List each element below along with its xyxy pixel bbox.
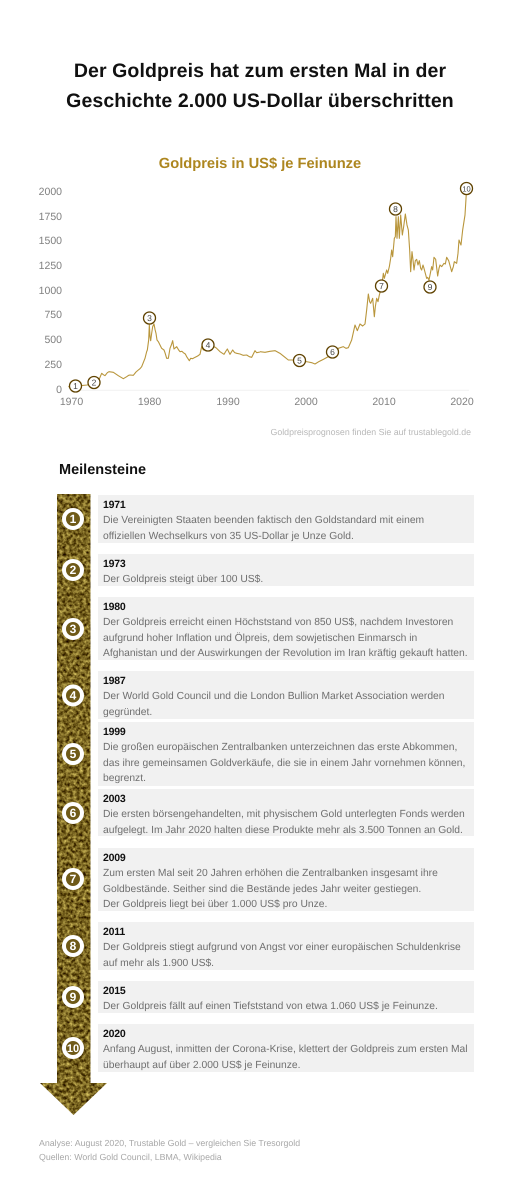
panel: 2011: 2011 <box>103 926 125 938</box>
panel: 1999 <box>98 722 474 786</box>
panel: 1971: 1971 <box>103 499 126 511</box>
footer: sources <box>39 1138 300 1162</box>
chart marker numbers: 7 <box>379 281 384 291</box>
panel: 2015: Der Goldpreis fällt auf einen Tiefststand von etwa 1.060 US$ je Feinunze. <box>103 1001 438 1012</box>
chart marker numbers: 3 <box>147 313 152 323</box>
panel: 2020 <box>98 1024 474 1072</box>
panel: 2003: aufgelegt. Im Jahr 2020 halten diese Produkte mehr als 3.500 Tonnen an Gold. <box>103 825 463 836</box>
chart marker numbers <box>73 184 471 391</box>
panel: 2003: 2003 <box>103 793 126 805</box>
panel: 2003: Die ersten börsengehandelten, mit physischem Gold unterlegten Fonds werden <box>103 809 465 820</box>
panel: 1971: offiziellen Wechselkurs von 35 US-Dollar je Unze Gold. <box>103 531 354 542</box>
panel: 2020: Anfang August, inmitten der Corona-Krise, klettert der Goldpreis zum ersten Mal <box>103 1044 468 1055</box>
chart marker numbers: 10 <box>462 184 471 194</box>
panel: 1973: 1973 <box>103 558 126 570</box>
panel: 2009: Zum ersten Mal seit 20 Jahren erhöhen die Zentralbanken insgesamt ihre <box>103 868 438 879</box>
x axis labels: 1980 <box>138 396 161 408</box>
panel: 2015: 2015 <box>103 985 126 997</box>
timeline badge numbers: 3 <box>70 622 77 636</box>
panel: 1980: 1980 <box>103 601 126 613</box>
panel: 1980: aufgrund hoher Inflation und Ölpreis, dem sowjetischen Einmarsch in <box>103 633 417 644</box>
panel: 2003 <box>98 789 474 836</box>
x axis labels: 2020 <box>450 396 474 408</box>
panel: 1980: Afghanistan und der Auswirkungen der Revolution im Iran kräftig gekauft hatten. <box>103 648 468 659</box>
footer: sources: Quellen: World Gold Council, LBMA, Wikipedia <box>39 1152 222 1162</box>
timeline badge numbers: 8 <box>70 939 77 953</box>
panel: 2009: Goldbestände. Seither sind die Bestände jedes Jahr weiter gestiegen. <box>103 884 421 895</box>
chart marker numbers: 9 <box>428 282 433 292</box>
timeline badge numbers: 7 <box>70 872 77 886</box>
y axis labels: 750 <box>44 309 62 321</box>
panel: 2015 <box>98 981 474 1013</box>
panel: 1987: Der World Gold Council und die London Bullion Market Association werden <box>103 691 445 702</box>
y axis labels: 1000 <box>39 285 62 297</box>
panel: 1999: das ihre gemeinsamen Goldverkäufe, die sie in einem Jahr vornehmen können, <box>103 758 465 769</box>
title: Geschichte 2.000 US-Dollar überschritten <box>66 90 454 112</box>
y axis labels: 1750 <box>39 211 62 223</box>
timeline badge numbers: 1 <box>70 512 77 526</box>
panel: 2011: auf mehr als 1.900 US$. <box>103 958 214 969</box>
panel: 1999: 1999 <box>103 726 126 738</box>
panel: 1980: Der Goldpreis erreicht einen Höchststand von 850 US$, nachdem Investoren <box>103 617 453 628</box>
panel: 1999: Die großen europäischen Zentralbanken unterzeichnen das erste Abkommen, <box>103 742 457 753</box>
y axis labels: 1500 <box>39 235 62 247</box>
chart marker numbers: 4 <box>206 340 211 350</box>
x axis labels: 1990 <box>216 396 240 408</box>
timeline badge numbers: 9 <box>70 990 77 1004</box>
timeline badge numbers <box>67 512 79 1055</box>
chart marker numbers: 1 <box>73 381 78 391</box>
panel: 1980 <box>98 597 474 660</box>
line chart: gold price <box>39 182 474 408</box>
chart marker numbers: 8 <box>393 204 398 214</box>
panel: 1973: Der Goldpreis steigt über 100 US$. <box>103 574 263 585</box>
panel: 1971: Die Vereinigten Staaten beenden faktisch den Goldstandard mit einem <box>103 515 424 526</box>
timeline badge numbers: 10 <box>67 1043 79 1055</box>
y axis labels: 250 <box>44 359 62 371</box>
panel: 2020: 2020 <box>103 1028 126 1040</box>
chart heading: Goldpreis in US$ je Feinunze <box>159 156 361 172</box>
chart marker numbers: 2 <box>92 378 97 388</box>
panel: 2011: Der Goldpreis stiegt aufgrund von Angst vor einer europäischen Schuldenkrise <box>103 942 461 953</box>
timeline badge numbers: 5 <box>70 747 77 761</box>
title: Der Goldpreis hat zum ersten Mal in der <box>74 60 446 82</box>
panel: 2009: Der Goldpreis liegt bei über 1.000 US$ pro Unze. <box>103 899 327 910</box>
panel: 2020: überhaupt auf über 2.000 US$ je Feinunze. <box>103 1060 300 1071</box>
y axis labels: 2000 <box>39 186 62 198</box>
timeline badge numbers: 2 <box>70 563 77 577</box>
panel: 1971 <box>98 495 474 543</box>
y axis labels: 500 <box>44 334 62 346</box>
x axis labels: 1970 <box>60 396 83 408</box>
panel: 1987: gegründet. <box>103 707 152 718</box>
x axis labels: 2010 <box>372 396 396 408</box>
panel: 1999: begrenzt. <box>103 773 146 784</box>
panel: 1973 <box>98 554 474 586</box>
panel: 2009: 2009 <box>103 852 126 864</box>
chart marker numbers: 6 <box>330 347 335 357</box>
timeline badge numbers: 4 <box>70 688 77 702</box>
y axis labels <box>39 186 62 396</box>
title <box>66 60 454 112</box>
chart source note: Goldpreisprognosen finden Sie auf trustablegold.de <box>270 427 471 437</box>
x axis labels <box>60 396 474 408</box>
panel: 2011 <box>98 922 474 970</box>
footer: sources: Analyse: August 2020, Trustable Gold – vergleichen Sie Tresorgold <box>39 1138 300 1148</box>
panel: 1987 <box>98 671 474 719</box>
panel: 2009 <box>98 848 474 911</box>
chart marker numbers: 5 <box>297 356 302 366</box>
y axis labels: 1250 <box>39 260 62 272</box>
x axis labels: 2000 <box>294 396 318 408</box>
y axis labels: 0 <box>56 384 62 396</box>
price line <box>68 193 466 387</box>
timeline badge numbers: 6 <box>70 806 77 820</box>
timeline badges <box>64 510 82 1057</box>
chart markers <box>70 182 472 392</box>
panel: 1987: 1987 <box>103 675 126 687</box>
milestones heading: Meilensteine <box>59 462 146 478</box>
